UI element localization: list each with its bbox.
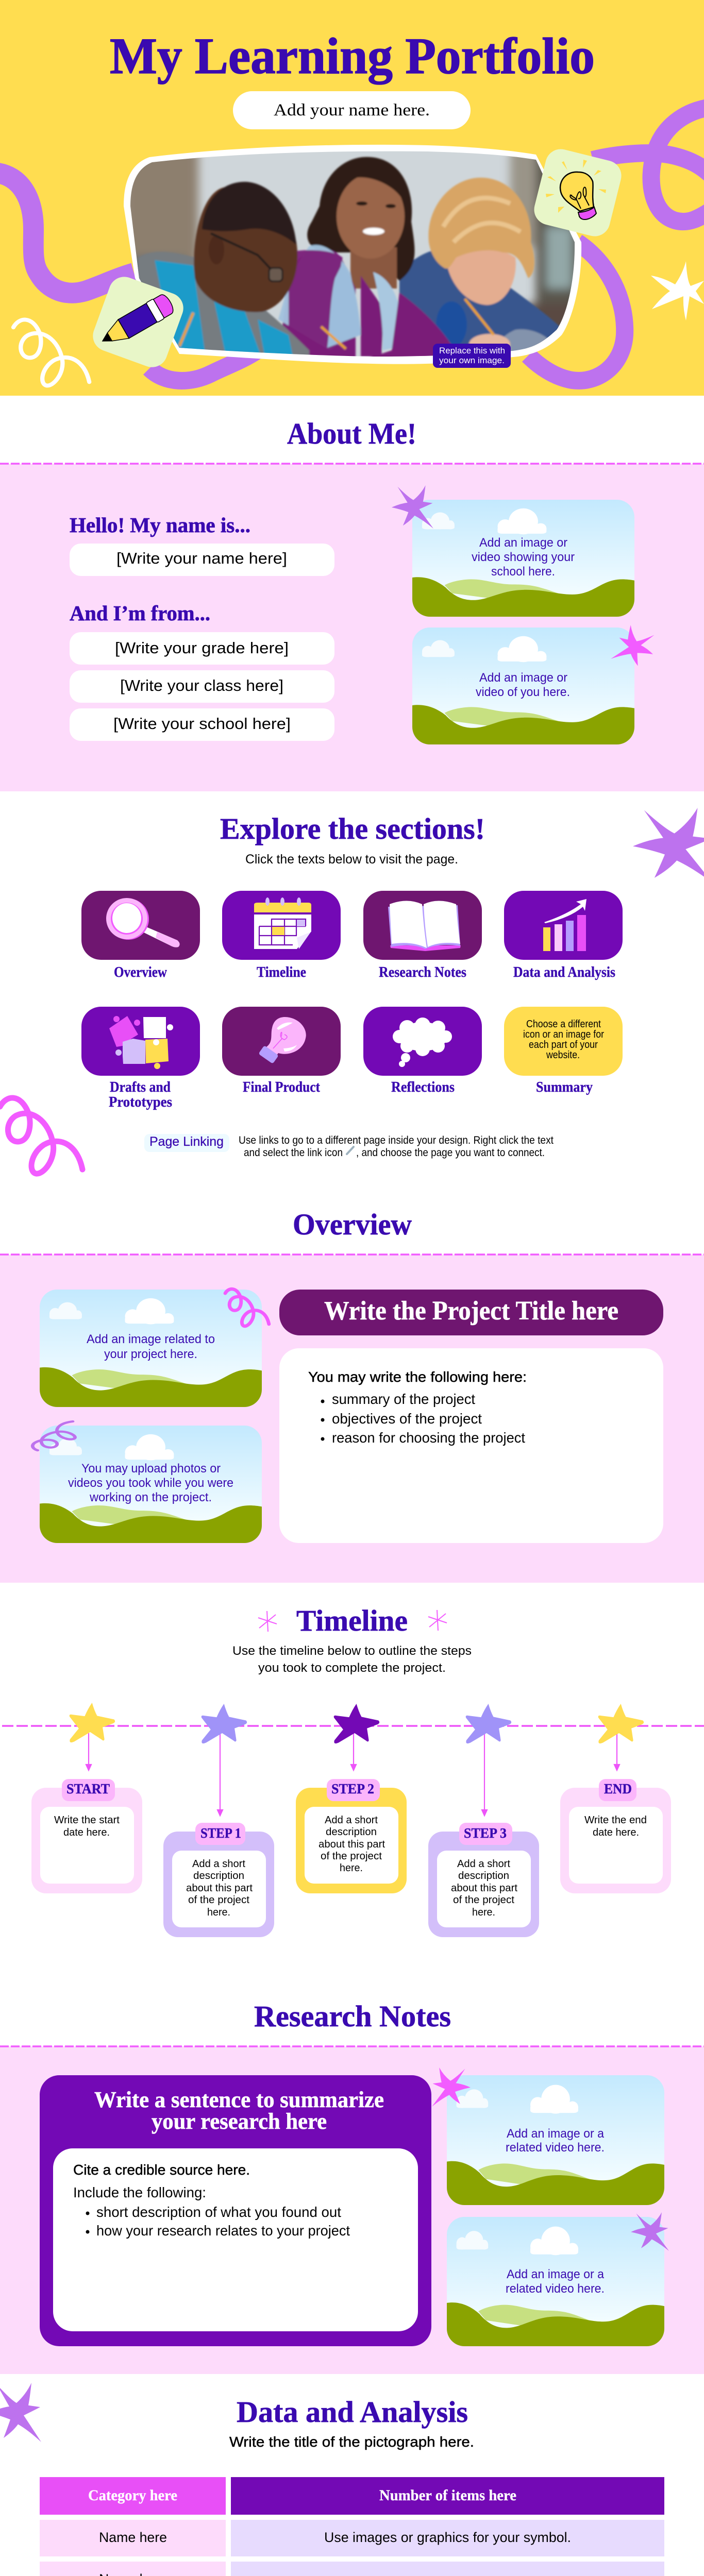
class field: [Write your class here] xyxy=(120,676,283,694)
star: step 1 xyxy=(202,1704,247,1743)
card: step 2 xyxy=(296,1779,407,1893)
photo frame xyxy=(124,145,581,364)
heading: Research Notes xyxy=(254,1999,451,2033)
citation card: short description of what you found out xyxy=(96,2204,341,2220)
purple squiggle bottom xyxy=(149,350,258,381)
placeholder: image one: Add an image or a xyxy=(507,2127,605,2141)
research summary panel: your research here xyxy=(152,2109,327,2134)
card: step 3: STEP 3 xyxy=(464,1825,507,1841)
card: step 2: of the project xyxy=(321,1851,382,1862)
card: step 2: Add a short xyxy=(325,1815,378,1826)
placeholder: work photos: videos you took while you were xyxy=(68,1476,233,1490)
placeholder: work photos: You may upload photos or xyxy=(81,1462,221,1476)
research summary panel: Write a sentence to summarize xyxy=(94,2087,384,2112)
page linking note: and select the link icon xyxy=(244,1147,343,1159)
pictograph title: Write the title of the pictograph here. xyxy=(229,2434,474,2450)
tile: summary: icon or an image for xyxy=(523,1029,604,1040)
asterisk left xyxy=(258,1611,277,1632)
tile label: summary: Summary xyxy=(536,1079,593,1095)
purple star doodle xyxy=(0,2383,41,2442)
project description card: objectives of the project xyxy=(332,1411,482,1427)
panel background xyxy=(0,2046,704,2374)
heading: About Me! xyxy=(287,417,416,450)
tile label: timeline: Timeline xyxy=(257,964,306,980)
project title bar: Write the Project Title here xyxy=(324,1296,618,1326)
image caption: your own image. xyxy=(439,355,505,365)
header: number of items: Number of items here xyxy=(379,2487,516,2504)
tile: summary: each part of your xyxy=(529,1039,598,1050)
card: step 2: STEP 2 xyxy=(331,1781,374,1797)
star: end xyxy=(598,1704,644,1743)
left boy xyxy=(138,251,309,361)
panel background xyxy=(0,1255,704,1583)
girl xyxy=(307,157,414,281)
section: explore the sections xyxy=(0,808,704,1174)
placeholder: project image: your project here. xyxy=(104,1347,197,1361)
arrow: step 1 xyxy=(217,1733,223,1816)
white star doodle xyxy=(651,261,704,320)
class field xyxy=(70,670,334,703)
star: step 2 xyxy=(334,1704,379,1743)
grade field xyxy=(70,632,334,665)
project description card: summary of the project xyxy=(332,1391,475,1407)
section: research notes xyxy=(0,1999,704,2374)
card: end xyxy=(560,1779,671,1893)
placeholder: work photos xyxy=(40,1426,262,1543)
section: data and analysis xyxy=(0,2383,704,2576)
section: about me xyxy=(0,417,704,791)
card: end: END xyxy=(604,1781,632,1797)
tile: timeline xyxy=(222,891,341,960)
placeholder: your image: video of you here. xyxy=(476,685,570,699)
white squiggle doodle xyxy=(13,319,89,385)
photo: three students at a desk xyxy=(130,151,575,357)
section: timeline xyxy=(2,1604,704,1937)
description: Use the timeline below to outline the steps xyxy=(232,1644,472,1658)
placeholder: image one xyxy=(447,2075,664,2205)
tile: research notes xyxy=(363,891,482,960)
page linking tag: Page Linking xyxy=(149,1134,224,1149)
tile label: overview: Overview xyxy=(114,964,167,980)
card: step 1: about this part xyxy=(186,1883,253,1894)
description: you took to complete the project. xyxy=(258,1661,446,1675)
citation card: Include the following: xyxy=(73,2184,206,2200)
greeting heading: Hello! My name is... xyxy=(70,513,250,537)
tile label: research notes: Research Notes xyxy=(379,964,466,980)
header: number of items xyxy=(231,2477,664,2515)
tile: summary: Choose a different xyxy=(526,1019,601,1030)
star: start xyxy=(70,1703,115,1742)
timeline dashed axis xyxy=(2,1725,704,1727)
pink star doodle xyxy=(432,2067,471,2107)
tile: summary xyxy=(504,1007,623,1076)
arrow: step 3 xyxy=(482,1733,487,1816)
card: step 2: description xyxy=(326,1826,377,1838)
card: step 3: description xyxy=(458,1870,509,1882)
card: step 3 xyxy=(428,1823,539,1937)
page linking note xyxy=(239,1134,554,1159)
card: step 2: about this part xyxy=(319,1839,385,1850)
placeholder: your image: Add an image or xyxy=(479,671,567,685)
placeholder: project image: Add an image related to xyxy=(87,1332,215,1346)
citation card: how your research relates to your project xyxy=(96,2223,350,2239)
arrow: start xyxy=(86,1733,91,1770)
description xyxy=(232,1644,472,1675)
placeholder: project image xyxy=(40,1290,262,1407)
image caption: Replace this with xyxy=(439,346,505,355)
card: end: Write the end xyxy=(584,1815,647,1826)
large purple star doodle xyxy=(633,808,704,883)
pink star doodle xyxy=(611,622,660,672)
tile label: drafts and prototypes: Drafts and xyxy=(110,1079,171,1095)
section: overview xyxy=(0,1208,704,1583)
purple star doodle xyxy=(631,2212,669,2251)
card: step 3: about this part xyxy=(451,1883,517,1894)
title: My Learning Portfolio xyxy=(110,27,595,84)
name field: [Write your name here] xyxy=(116,549,287,567)
pencil sticker xyxy=(89,273,188,371)
placeholder: school image: Add an image or xyxy=(479,536,567,550)
card: start: Write the start xyxy=(54,1815,120,1826)
page linking note: Use links to go to a different page inside your design. Right click the text xyxy=(239,1134,554,1146)
placeholder: work photos: working on the project. xyxy=(89,1490,212,1504)
grade field: [Write your grade here] xyxy=(115,639,289,657)
header: category xyxy=(40,2477,226,2515)
purple squiggle left xyxy=(0,173,134,293)
school field xyxy=(70,708,334,741)
origin heading: And I’m from... xyxy=(70,601,210,625)
instruction: Click the texts below to visit the page. xyxy=(245,852,458,867)
card: start: date here. xyxy=(63,1827,110,1838)
panel background xyxy=(0,464,704,791)
placeholder: image two xyxy=(447,2217,664,2346)
name pill xyxy=(233,91,471,129)
card: step 1 xyxy=(163,1823,274,1937)
row one: Use images or graphics for your symbol. xyxy=(324,2530,571,2545)
project description card: You may write the following here: xyxy=(308,1369,527,1385)
row one xyxy=(40,2520,664,2556)
school field: [Write your school here] xyxy=(113,715,291,733)
row two xyxy=(40,2562,664,2576)
tile: reflections xyxy=(363,1007,482,1076)
placeholder: image two: related video here. xyxy=(506,2282,605,2296)
right boy xyxy=(398,250,560,344)
citation card xyxy=(53,2148,418,2331)
pink squiggle doodle xyxy=(0,1098,82,1174)
card: step 1: Add a short xyxy=(192,1858,245,1870)
arrow: end xyxy=(614,1733,619,1770)
tile: data and analysis xyxy=(504,891,623,960)
card: step 3: of the project xyxy=(453,1894,514,1906)
lightbulb sticker xyxy=(531,146,625,240)
panel: cover xyxy=(0,0,704,396)
tile label: drafts and prototypes: Prototypes xyxy=(109,1094,172,1110)
name field xyxy=(70,544,334,576)
heading: Overview xyxy=(293,1208,412,1241)
card: start: START xyxy=(66,1781,110,1797)
placeholder: image one: related video here. xyxy=(506,2141,605,2155)
tile label: data and analysis: Data and Analysis xyxy=(513,964,615,980)
heading: Data and Analysis xyxy=(237,2395,468,2429)
purple squiggle doodle xyxy=(32,1421,75,1450)
tile label: drafts and prototypes xyxy=(109,1079,172,1110)
arrow: step 2 xyxy=(351,1733,356,1770)
name pill: Add your name here. xyxy=(274,101,430,120)
card: step 3: here. xyxy=(472,1907,495,1918)
pictograph table xyxy=(40,2477,664,2576)
page linking note: , and choose the page you want to connect. xyxy=(356,1147,545,1159)
image caption xyxy=(433,344,511,368)
placeholder: image two: Add an image or a xyxy=(507,2267,605,2281)
tile: overview xyxy=(81,891,200,960)
placeholder: your image xyxy=(412,628,634,744)
card: step 2: here. xyxy=(340,1862,363,1874)
placeholder: school image: school here. xyxy=(491,565,555,579)
project description card: reason for choosing the project xyxy=(332,1430,525,1446)
card: step 1: STEP 1 xyxy=(200,1825,241,1841)
row one: Name here xyxy=(99,2530,167,2545)
purple star doodle xyxy=(392,485,433,529)
header: category: Category here xyxy=(88,2487,177,2504)
card: end: date here. xyxy=(593,1827,639,1838)
card: step 3: Add a short xyxy=(457,1858,510,1870)
tile: final product xyxy=(222,1007,341,1076)
tile label: final product: Final Product xyxy=(243,1079,320,1095)
tile: drafts and prototypes xyxy=(81,1007,200,1076)
heading: Timeline xyxy=(296,1604,408,1637)
placeholder: school image: video showing your xyxy=(472,550,575,564)
tile: summary: website. xyxy=(546,1049,580,1061)
project description card xyxy=(279,1348,663,1543)
asterisk right xyxy=(428,1610,447,1631)
project title bar xyxy=(279,1290,663,1335)
heading: Explore the sections! xyxy=(220,812,485,845)
research summary panel xyxy=(40,2075,431,2346)
citation card: Cite a credible source here. xyxy=(73,2162,250,2178)
star: step 3 xyxy=(466,1704,511,1743)
card: step 1: of the project xyxy=(188,1894,249,1906)
purple squiggle right xyxy=(528,107,704,381)
tile label: reflections: Reflections xyxy=(391,1079,455,1095)
pink squiggle doodle xyxy=(225,1289,269,1326)
card: step 1: here. xyxy=(207,1907,230,1918)
placeholder: school image xyxy=(412,500,634,617)
card: step 1: description xyxy=(193,1870,244,1882)
card: start xyxy=(31,1779,142,1893)
